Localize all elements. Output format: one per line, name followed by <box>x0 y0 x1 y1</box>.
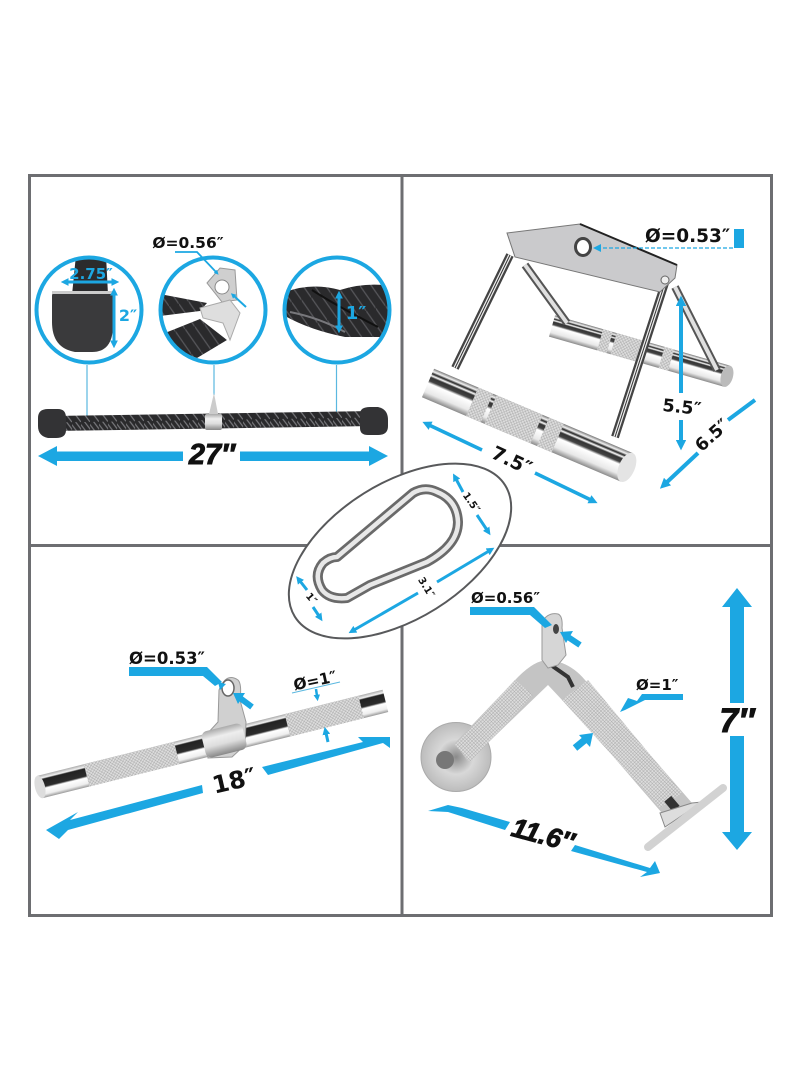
callout: end cap: 2″ <box>119 306 137 325</box>
dimension: 3.1 <box>354 551 489 630</box>
dimension: 3.1: 3.1″ <box>415 575 437 601</box>
callout: end cap: 2.75″ <box>69 265 113 283</box>
dimension: 11.6 <box>428 805 660 877</box>
callout: rope hook <box>152 234 266 362</box>
dimension: 1: 1″ <box>303 591 319 607</box>
panel: row handle <box>422 224 755 500</box>
dimension: diameter 1 <box>575 676 683 748</box>
carabiner <box>318 489 458 598</box>
label: 18 inch: 18″ <box>210 762 259 800</box>
back bar <box>549 315 736 388</box>
rope bar <box>38 393 388 438</box>
dimension: hole 0.56: Ø=0.56″ <box>471 589 540 607</box>
callout: rope hook: Ø=0.56″ <box>152 234 224 252</box>
label: 11.6 inch: 11.6″ <box>508 812 579 858</box>
left disc <box>421 722 491 792</box>
dimension: 6.5 <box>666 400 755 483</box>
mounting plate <box>507 224 677 292</box>
V tube <box>455 660 702 827</box>
dimension: 5.5: 5.5″ <box>662 396 702 420</box>
front bar <box>422 369 640 485</box>
dimension: hole 0.53: Ø=0.53″ <box>129 649 205 668</box>
dimension: hole 0.56 <box>470 589 580 645</box>
dimension: diameter 1 <box>292 668 340 742</box>
label: 7 inch: 7″ <box>719 702 756 740</box>
callout: rope detail: 1″ <box>346 303 366 324</box>
dimension: 1.5 <box>456 479 487 530</box>
panel: tricep rope <box>36 234 392 471</box>
dimension: 7.5 <box>429 425 591 500</box>
dimension: hole 0.53 <box>129 649 252 707</box>
dimension: 1.5: 1.5″ <box>460 491 482 516</box>
panel frame grid <box>29 175 772 916</box>
arrow: 27 inch length <box>38 446 388 466</box>
swivel and eye <box>200 678 248 759</box>
dimension: diameter 1: Ø=1″ <box>636 676 679 694</box>
dimension: 7 <box>722 588 752 850</box>
bar <box>32 690 388 799</box>
dimension: 6.5: 6.5″ <box>692 415 734 456</box>
leader lines <box>87 365 336 417</box>
dimension: 1 <box>300 581 319 616</box>
eye tab <box>542 614 566 668</box>
callout: rope detail <box>284 258 392 362</box>
callout: end cap <box>36 255 142 362</box>
dimension: hole 0.53: Ø=0.53″ <box>645 226 730 247</box>
panel: carabiner <box>259 428 541 674</box>
dimension: 18 <box>46 737 390 839</box>
dimension: 7.5: 7.5″ <box>488 442 536 480</box>
panel: V handle <box>421 588 756 877</box>
struts <box>455 255 717 437</box>
panel: straight bar <box>32 649 390 839</box>
dimension: 5.5 <box>662 304 702 442</box>
right disc <box>648 788 723 847</box>
dimension: hole 0.53 <box>593 226 744 252</box>
dimension: diameter 1: Ø=1″ <box>292 668 339 694</box>
label: 27 inch: 27″ <box>188 439 236 471</box>
